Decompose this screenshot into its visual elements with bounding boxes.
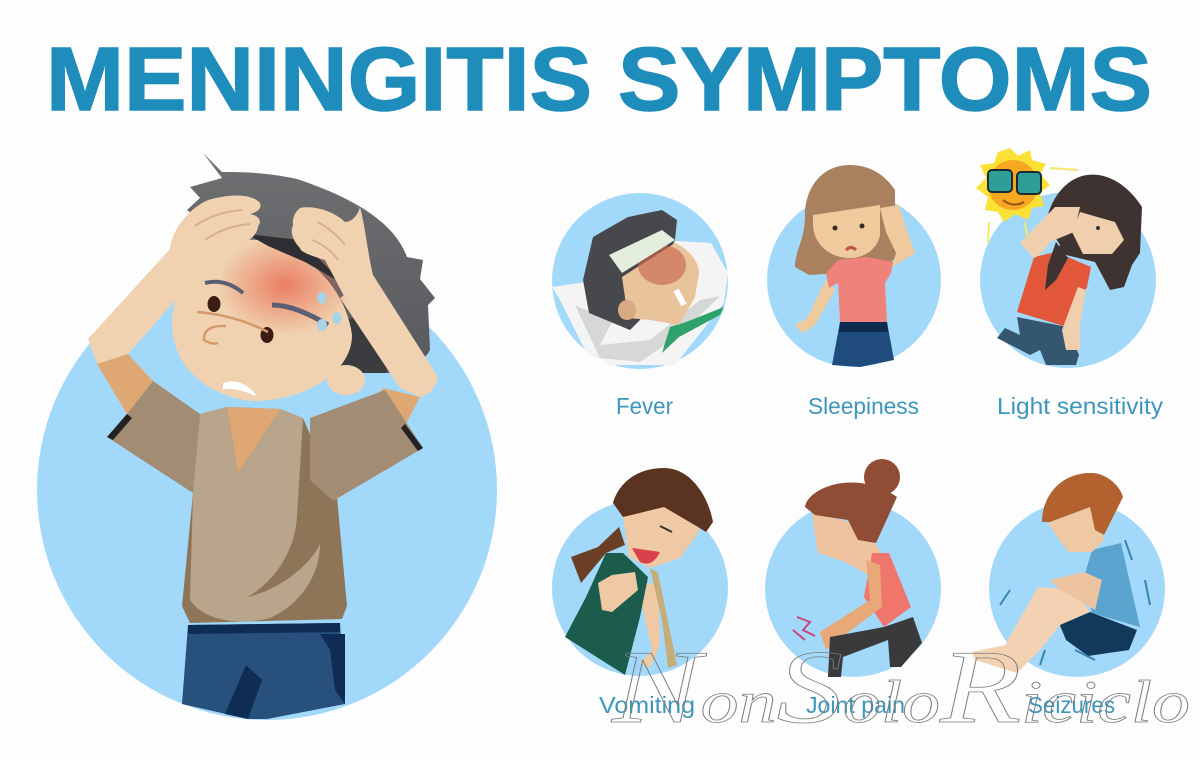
fringe xyxy=(247,234,345,285)
label: Fever xyxy=(616,393,673,419)
hair xyxy=(1042,473,1123,535)
arm xyxy=(1050,572,1102,610)
panel: fever xyxy=(552,193,728,419)
shirt body xyxy=(182,407,347,623)
green collar xyxy=(662,307,724,353)
lower arm xyxy=(1062,287,1086,350)
shorts xyxy=(1059,612,1137,656)
ear xyxy=(327,365,365,395)
eyebrows xyxy=(205,282,243,293)
arm down xyxy=(640,583,660,668)
shirt xyxy=(826,257,893,322)
long hair front xyxy=(1045,242,1068,290)
pants xyxy=(997,317,1079,365)
hair xyxy=(805,483,897,543)
circle xyxy=(980,192,1156,368)
vomit streak xyxy=(650,568,677,668)
sun xyxy=(976,148,1050,222)
label: Seizures xyxy=(1028,692,1115,718)
shirt xyxy=(1084,543,1140,627)
legs xyxy=(972,587,1090,673)
face xyxy=(622,498,700,568)
label: Vomiting xyxy=(599,692,695,718)
main illustration: man with headache xyxy=(37,153,497,720)
shirt xyxy=(1017,252,1091,327)
circle xyxy=(767,193,941,367)
right arm xyxy=(340,275,438,397)
face xyxy=(622,243,699,325)
hair xyxy=(583,210,677,330)
circle xyxy=(989,501,1165,677)
arm xyxy=(820,560,882,650)
label: Sleepiness xyxy=(808,393,919,419)
hair xyxy=(1045,175,1142,290)
circle xyxy=(552,500,728,676)
panel: sleepiness xyxy=(767,165,941,419)
mouth xyxy=(676,290,684,305)
face xyxy=(813,205,880,258)
raised arm xyxy=(880,205,915,267)
sweat drops xyxy=(317,292,342,331)
hair xyxy=(795,165,899,275)
bun xyxy=(864,459,900,495)
ear xyxy=(618,300,636,320)
panel: vomiting xyxy=(552,468,728,718)
mouth xyxy=(224,382,255,395)
hand on chest xyxy=(598,572,638,612)
headband xyxy=(609,230,675,273)
panel: seizures xyxy=(972,473,1165,718)
watermark: N onSoloR iciclo xyxy=(611,628,1190,745)
bedding xyxy=(552,240,728,365)
dress xyxy=(565,553,648,675)
hands xyxy=(170,196,261,285)
face xyxy=(172,240,352,401)
pants xyxy=(828,617,922,677)
nose xyxy=(197,312,268,344)
circle xyxy=(552,193,728,369)
hair xyxy=(187,153,435,373)
mouth xyxy=(632,548,660,564)
panel: joint pain xyxy=(765,459,941,718)
face xyxy=(1072,212,1124,254)
raised arm xyxy=(1020,207,1080,258)
face xyxy=(1048,505,1104,552)
title: MENINGITIS SYMPTOMS xyxy=(46,30,1152,130)
shiver lines xyxy=(1000,540,1150,665)
right sleeve xyxy=(310,390,423,501)
panel: light sensitivity xyxy=(976,148,1164,419)
top xyxy=(864,553,911,627)
pain squiggle xyxy=(793,617,815,640)
pants xyxy=(182,623,345,719)
ponytail xyxy=(571,527,625,583)
circle xyxy=(765,501,941,677)
hair xyxy=(613,468,713,532)
light beams xyxy=(988,168,1078,243)
skirt xyxy=(832,322,894,367)
left arm xyxy=(795,280,835,333)
label: Joint pain xyxy=(806,692,905,718)
neck xyxy=(227,407,280,473)
forehead flush xyxy=(217,235,353,335)
label: Light sensitivity xyxy=(997,393,1164,419)
face and neck xyxy=(812,512,880,575)
left arm xyxy=(88,249,200,364)
eyes xyxy=(208,296,220,312)
background circle xyxy=(37,260,497,720)
left sleeve xyxy=(107,381,200,493)
